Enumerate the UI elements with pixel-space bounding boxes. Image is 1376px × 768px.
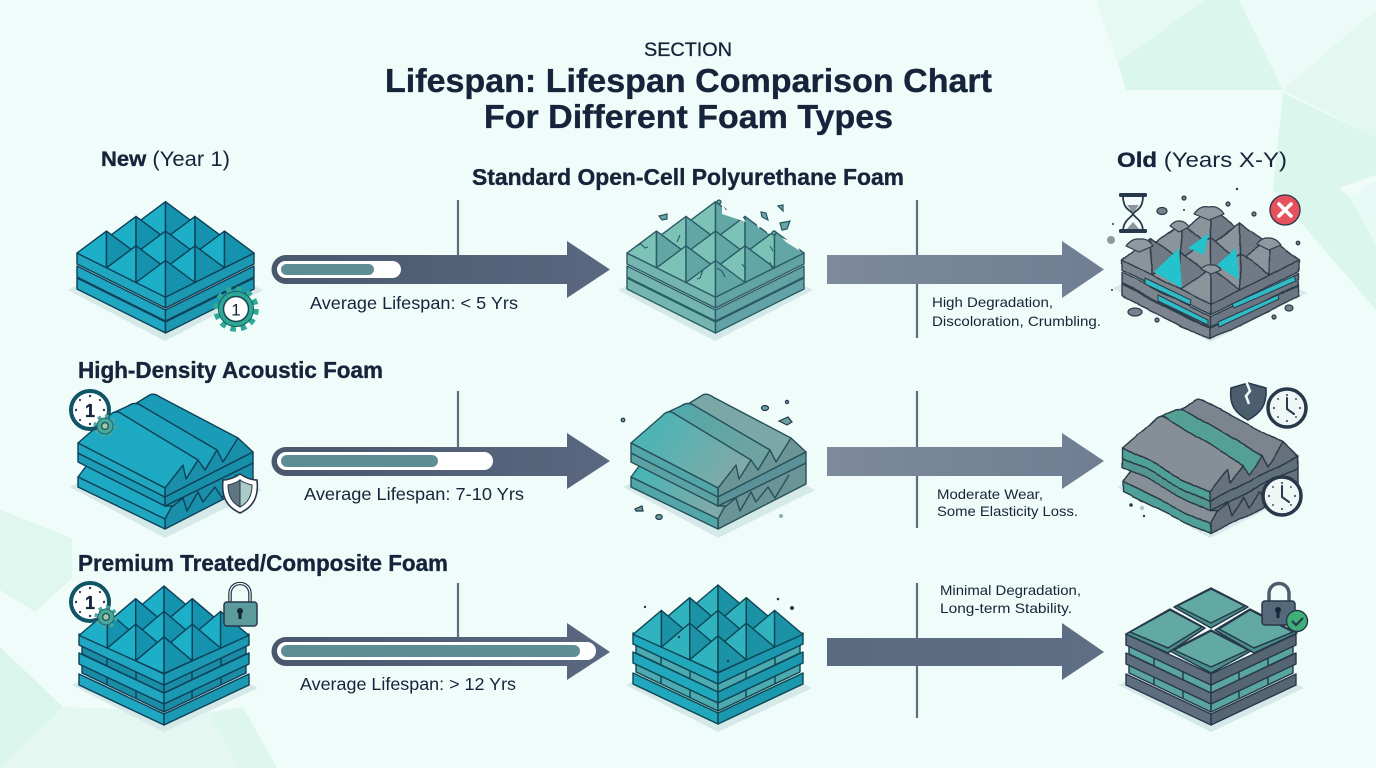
degradation note: Discoloration, Crumbling. [932, 313, 1101, 329]
icon: gear year 1: 1 [231, 300, 241, 320]
icon: clock with gear: 1 [85, 401, 95, 421]
old worn wedge foam [1117, 399, 1305, 538]
lifespan label: Average Lifespan: > 12 Yrs [300, 674, 516, 694]
icon: clock lower [1263, 477, 1301, 515]
worn pyramid foam [618, 200, 813, 341]
icon: clock with gear: 1 [85, 593, 95, 613]
old crumbled foam [1107, 188, 1307, 342]
icon: cracked shield [1231, 381, 1266, 420]
title: Lifespan: Lifespan Comparison Chart [385, 62, 992, 99]
column heading: new: New (Year 1) [101, 148, 230, 171]
plain arrow with divider [827, 583, 1104, 718]
plain arrow with divider [827, 200, 1104, 338]
icon: padlock with check [1262, 584, 1308, 632]
icon: clock with gear [71, 583, 116, 626]
panel: standard open-cell foam row [68, 164, 1307, 342]
stability note: Long-term Stability. [940, 600, 1072, 616]
progress arrow [272, 200, 610, 298]
panel: premium treated composite foam row [71, 550, 1308, 732]
wear note [937, 486, 1078, 519]
icon: clock with gear [71, 391, 114, 436]
row heading: Standard Open-Cell Polyurethane Foam [472, 164, 904, 190]
new wedge foam [70, 394, 262, 538]
title [385, 62, 992, 135]
row heading: High-Density Acoustic Foam [78, 357, 383, 383]
stability note: Minimal Degradation, [940, 582, 1081, 598]
title: For Different Foam Types [484, 98, 893, 135]
column heading: old: Old (Years X-Y) [1117, 149, 1287, 172]
section label: SECTION [644, 40, 732, 61]
stability note [940, 582, 1081, 616]
icon: hourglass [1119, 193, 1147, 233]
lifespan label: Average Lifespan: 7-10 Yrs [304, 484, 524, 504]
lifespan label: Average Lifespan: < 5 Yrs [310, 293, 518, 313]
icon: padlock [224, 584, 257, 626]
degradation note: High Degradation, [932, 294, 1053, 310]
new premium foam [72, 586, 258, 732]
old premium flat foam [1118, 588, 1304, 732]
progress arrow [272, 583, 610, 680]
new pyramid foam [68, 202, 263, 341]
icon: red cross [1270, 195, 1300, 225]
plain arrow with divider [827, 391, 1104, 528]
row heading: Premium Treated/Composite Foam [78, 550, 448, 576]
wear note: Some Elasticity Loss. [937, 503, 1078, 519]
worn wedge foam [621, 394, 815, 538]
degradation note [932, 294, 1101, 329]
progress arrow [272, 391, 610, 489]
wear note: Moderate Wear, [937, 486, 1043, 502]
aged premium foam [626, 585, 812, 732]
panel: high-density acoustic foam row [70, 357, 1306, 538]
icon: shield [223, 474, 257, 513]
icon: clock [1268, 389, 1306, 427]
icon: gear year 1 [216, 289, 256, 329]
